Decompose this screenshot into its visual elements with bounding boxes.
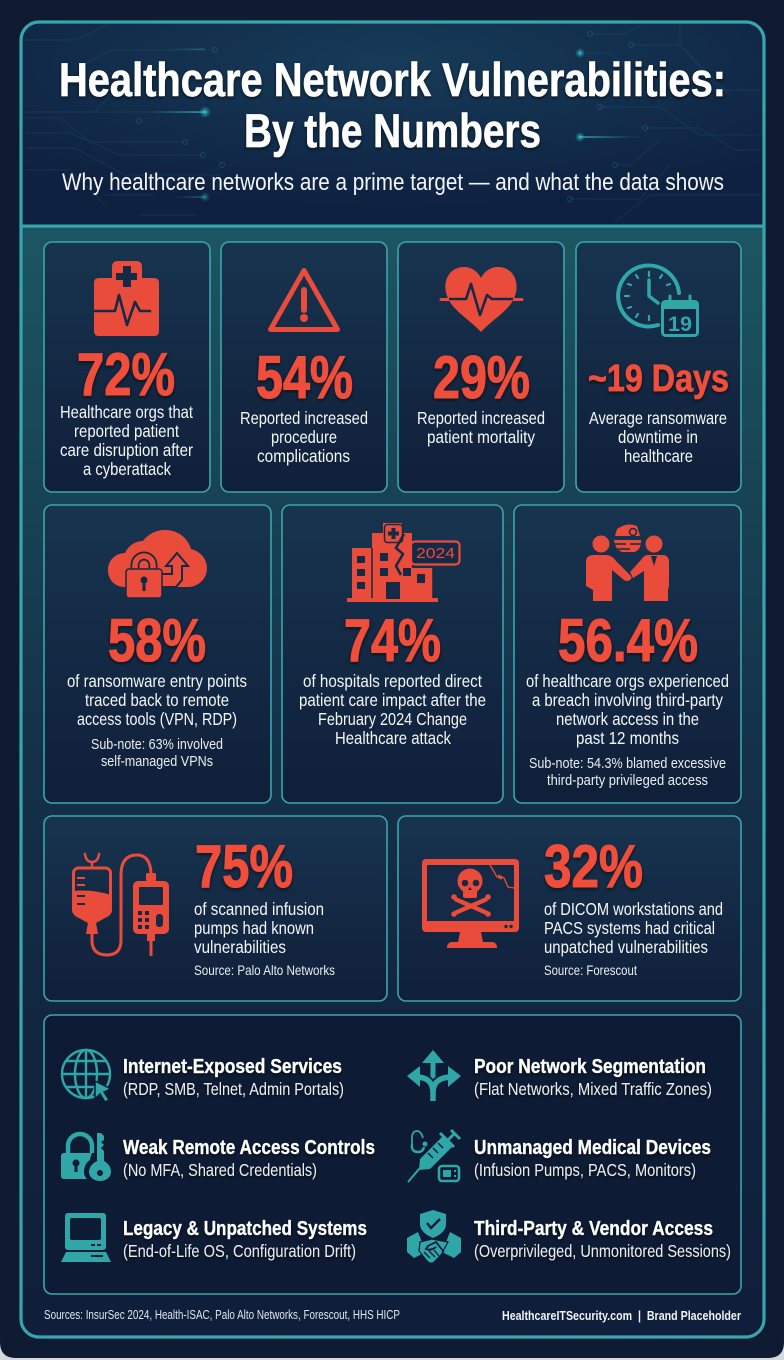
description: reported patient — [74, 421, 179, 441]
description: care disruption after — [60, 440, 193, 460]
item: third-party and vendor access — [407, 1210, 731, 1263]
source: Source: Forescout — [544, 962, 637, 978]
description: PACS systems had critical — [544, 918, 715, 938]
description — [60, 402, 193, 479]
icon: globe with cursor — [62, 1050, 111, 1102]
stat: 72%: 72% — [77, 341, 175, 408]
stat: 74%: 74% — [344, 607, 441, 674]
description: network access in the — [556, 709, 699, 729]
description: Reported increased — [417, 408, 545, 428]
description — [526, 671, 729, 748]
description: pumps had known — [194, 918, 314, 938]
icon: branching arrows — [407, 1050, 461, 1101]
icon: cracked hospital with 2024 sign — [347, 523, 460, 602]
description: February 2024 Change — [318, 709, 467, 729]
source: Source: Palo Alto Networks — [194, 962, 335, 978]
panel: 29% patient mortality — [398, 242, 564, 492]
icon: padlock and key — [61, 1133, 111, 1181]
icon: warning triangle — [270, 270, 338, 330]
description: procedure — [271, 427, 337, 447]
description: complications — [257, 446, 350, 466]
text — [123, 1136, 375, 1180]
description: a cyberattack — [83, 459, 171, 479]
icon: heart with pulse — [441, 267, 522, 332]
text: (Infusion Pumps, PACS, Monitors) — [474, 1160, 696, 1180]
text: Legacy & Unpatched Systems — [123, 1217, 367, 1240]
stat: 54%: 54% — [256, 344, 353, 411]
icon: clock and calendar: 19 — [668, 313, 692, 336]
description: unpatched vulnerabilities — [544, 937, 708, 957]
panel: 56.4% third-party breach — [514, 505, 741, 803]
icon: handshake with masked intruder — [586, 525, 669, 601]
stat: 58%: 58% — [108, 607, 206, 674]
description — [240, 408, 368, 466]
item: weak remote access controls — [61, 1133, 375, 1181]
item: poor network segmentation — [407, 1050, 712, 1101]
panel: 54% procedure complications — [221, 242, 387, 492]
text — [474, 1136, 711, 1180]
description: vulnerabilities — [194, 937, 286, 957]
description: access tools (VPN, RDP) — [77, 709, 237, 729]
text: (Flat Networks, Mixed Traffic Zones) — [474, 1079, 712, 1099]
item: unmanaged medical devices — [408, 1130, 711, 1182]
text: Internet-Exposed Services — [123, 1055, 342, 1078]
stat: 29%: 29% — [433, 344, 530, 411]
icon: cloud with lock — [108, 530, 207, 598]
description — [544, 899, 723, 957]
text: (Overprivileged, Unmonitored Sessions) — [474, 1241, 731, 1261]
panel: 72% patient care disruption — [44, 242, 210, 492]
text — [474, 1217, 731, 1261]
description: healthcare — [624, 446, 693, 466]
description — [299, 671, 486, 748]
sub-note: Sub-note: 63% involved — [91, 736, 223, 753]
icon: clock and calendar — [618, 265, 698, 336]
panel: 74% hospitals impacted — [282, 505, 503, 803]
title — [59, 53, 726, 157]
description: of ransomware entry points — [67, 671, 247, 691]
text: Unmanaged Medical Devices — [474, 1136, 711, 1159]
description: patient care impact after the — [299, 690, 486, 710]
description — [417, 408, 545, 447]
description: of healthcare orgs experienced — [526, 671, 729, 691]
text: (End-of-Life OS, Configuration Drift) — [123, 1241, 356, 1261]
panel: vulnerability categories — [44, 1015, 741, 1294]
text: Weak Remote Access Controls — [123, 1136, 375, 1159]
description — [589, 408, 727, 466]
stat: 32%: 32% — [544, 833, 643, 900]
description: Reported increased — [240, 408, 368, 428]
text: (RDP, SMB, Telnet, Admin Portals) — [123, 1079, 344, 1099]
description — [67, 671, 247, 729]
text: Third-Party & Vendor Access — [474, 1217, 713, 1240]
title: By the Numbers — [244, 104, 541, 157]
description: traced back to remote — [85, 690, 229, 710]
sub-note — [91, 736, 223, 770]
sub-note: self-managed VPNs — [101, 753, 213, 770]
footer sources: Sources: InsurSec 2024, Health-ISAC, Palo Alto Networks, Forescout, HHS HICP — [44, 1308, 400, 1322]
icon: cracked hospital with 2024 sign: 2024 — [416, 545, 455, 562]
panel: 75% infusion pumps — [44, 816, 387, 1001]
text: (No MFA, Shared Credentials) — [123, 1160, 317, 1180]
description: Healthcare attack — [335, 728, 451, 748]
panel: 32% DICOM and PACS — [398, 816, 741, 1001]
description — [194, 899, 324, 957]
description: of scanned infusion — [194, 899, 324, 919]
description: of hospitals reported direct — [303, 671, 482, 691]
icon: legacy computer — [61, 1213, 111, 1262]
icon: monitor with skull — [422, 859, 519, 948]
description: downtime in — [618, 427, 698, 447]
description: a breach involving third-party — [532, 690, 723, 710]
description: Average ransomware — [589, 408, 727, 428]
panel: 19 days downtime — [576, 242, 741, 492]
item: legacy and unpatched systems — [61, 1213, 367, 1262]
stat: 56.4%: 56.4% — [558, 607, 698, 674]
stat: ~19 Days: ~19 Days — [588, 358, 729, 400]
item: internet-exposed services — [62, 1050, 344, 1102]
icon: shield over handshake — [407, 1210, 461, 1263]
description: of DICOM workstations and — [544, 899, 723, 919]
panel: 58% remote access entry points — [44, 505, 271, 803]
icon: IV bag and infusion pump — [73, 854, 169, 956]
sub-note: Sub-note: 54.3% blamed excessive — [529, 755, 726, 772]
text: Poor Network Segmentation — [474, 1055, 706, 1078]
sub-note — [529, 755, 726, 789]
sub-note: third-party privileged access — [547, 772, 708, 789]
description: Healthcare orgs that — [60, 402, 193, 422]
description: past 12 months — [576, 728, 679, 748]
stat: 75%: 75% — [195, 833, 293, 900]
text — [474, 1055, 712, 1099]
icon: medical bag — [94, 261, 159, 336]
description: patient mortality — [427, 427, 535, 447]
text — [123, 1055, 344, 1099]
icon: syringe, stethoscope and monitor — [408, 1130, 460, 1182]
text — [123, 1217, 367, 1261]
